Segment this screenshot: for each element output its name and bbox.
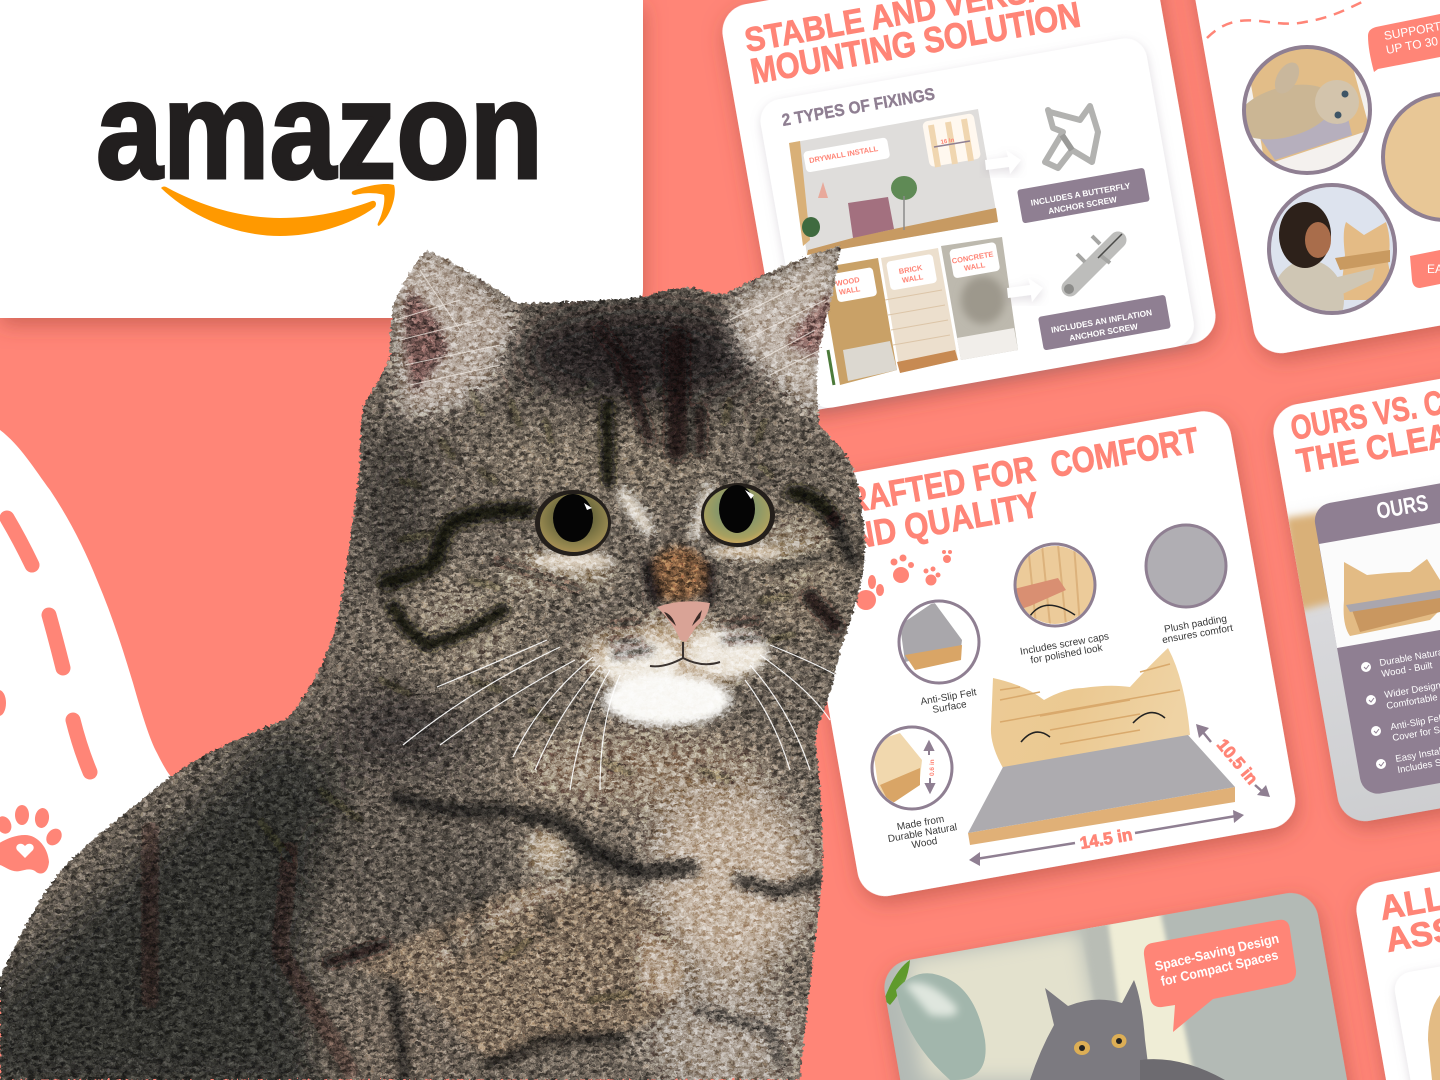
cat right eye — [701, 483, 775, 547]
label: concrete wall: WALL — [963, 260, 986, 273]
dimension: 10.5 in — [1196, 724, 1270, 797]
feature: natural wood — [870, 725, 958, 851]
card: ours vs competitors — [1269, 332, 1440, 826]
product: cat shelf — [968, 648, 1235, 845]
card: space-saving photo — [880, 889, 1387, 1080]
label: drywall install — [803, 137, 890, 173]
list: benefits: Cover for S — [1392, 725, 1440, 744]
caption: Anti-Slip Felt — [920, 687, 978, 708]
photo: drywall room — [789, 109, 998, 255]
heading: and quality: AND QUALITY — [826, 484, 1042, 561]
label: concrete wall — [949, 242, 1000, 279]
label: butterfly anchor screw: ANCHOR SCREW — [1047, 194, 1118, 216]
grey cat — [1030, 980, 1150, 1080]
label: butterfly anchor screw — [1017, 168, 1150, 223]
arrow: to butterfly anchor — [985, 150, 1021, 174]
tabby markings — [150, 330, 852, 1080]
product: wood board — [1428, 995, 1440, 1080]
inset: stud spacing: 16 in — [940, 138, 955, 146]
card: crafted for comfort and quality — [789, 407, 1300, 901]
cat ear hairs — [395, 270, 825, 385]
list: benefits: Wood - Built — [1381, 660, 1434, 680]
list: benefits — [1361, 647, 1440, 776]
photo: tabby cat — [0, 245, 866, 1080]
dashed curve — [1207, 2, 1362, 38]
photo: concrete wall — [941, 237, 1018, 360]
caption: Wood — [911, 836, 938, 851]
icon: butterfly anchor — [1045, 106, 1098, 168]
product: shelf — [1344, 559, 1440, 636]
card: all assembly — [1352, 810, 1440, 1080]
caption: Plush padding — [1163, 614, 1228, 635]
panel: amazon logo card — [0, 0, 643, 318]
label: inflation anchor screw: INCLUDES AN INFLATION — [1050, 307, 1153, 335]
label: wood wall: WOOD — [835, 275, 861, 288]
cat fur body — [0, 245, 866, 1080]
list: benefits: Comfortable — [1386, 692, 1438, 712]
label: inflation anchor screw: ANCHOR SCREW — [1068, 321, 1139, 343]
caption: for polished look — [1030, 643, 1104, 666]
label: brick wall: BRICK — [898, 263, 924, 276]
callout: space-saving design: Space-Saving Design — [1153, 931, 1280, 974]
icon: paw print — [0, 805, 65, 874]
photo circle: shelf close-up — [1383, 94, 1440, 220]
arrow: thickness — [925, 742, 934, 792]
card: stable and versatile mounting solution — [718, 0, 1220, 415]
label: butterfly anchor screw: INCLUDES A BUTTERFLY — [1030, 180, 1132, 208]
icon: inflation anchor — [1064, 234, 1122, 294]
caption: Durable Natural — [887, 822, 958, 845]
dimension: 10.5 in: 10.5 in — [1213, 735, 1262, 788]
panel: ours column — [1312, 454, 1440, 797]
dimension: 14.5 in — [969, 810, 1244, 866]
heading: crafted for comfort: CRAFTED FOR COMFORT — [822, 419, 1202, 525]
heading: amazon wordmark: amazon — [96, 53, 543, 208]
cat left eye — [535, 490, 611, 556]
panel: white wavy shape with dashed path — [0, 430, 172, 1000]
label: wood wall — [833, 267, 877, 303]
heading: fixings: 2 TYPES OF FIXINGS — [780, 84, 936, 130]
label: brick wall — [886, 254, 937, 291]
caption: Surface — [932, 699, 968, 716]
icon: paw trail — [856, 550, 952, 610]
fur mottling — [260, 390, 794, 1000]
label: concrete wall: CONCRETE — [951, 249, 994, 266]
feature: screw caps — [1010, 540, 1110, 666]
callout: space-saving design — [1144, 920, 1296, 1032]
feature: plush padding — [1146, 525, 1234, 646]
photo: brick wall — [881, 248, 958, 373]
label: wood wall: WALL — [838, 284, 861, 297]
panel: inner — [1392, 940, 1440, 1080]
caption — [887, 814, 958, 851]
caption: ensures comfort — [1161, 623, 1234, 646]
photo circle: kitten lying on shelf — [1242, 45, 1372, 175]
blurred wood backdrop — [1288, 507, 1330, 614]
label: easy install — [1410, 250, 1440, 288]
arrow: to inflation anchor — [1007, 278, 1043, 302]
caption: Made from — [896, 814, 945, 833]
dimension: 14.5 in: 14.5 in — [1078, 825, 1134, 853]
card: weight and installation circles — [1185, 0, 1440, 358]
label: inflation anchor screw — [1038, 295, 1171, 350]
caption: Includes screw caps — [1019, 631, 1110, 658]
label: drywall install: DRYWALL INSTALL — [808, 144, 879, 165]
label: brick wall: WALL — [901, 272, 924, 285]
photo: window light, leaf and grey cat — [884, 910, 1225, 1080]
label: 0.6 in: 0.6 in — [929, 759, 936, 776]
feature: anti-slip felt surface — [895, 600, 985, 716]
photo circle: woman installing shelf — [1267, 183, 1397, 315]
icon: amazon smile arrow — [161, 184, 395, 236]
panel: 2 types of fixings — [757, 35, 1197, 411]
callout: space-saving design: for Compact Spaces — [1159, 947, 1280, 989]
cat paw — [351, 882, 685, 1063]
inset: stud spacing — [922, 113, 981, 167]
cat whiskers — [403, 640, 845, 790]
list: benefits: Wider Design — [1384, 680, 1440, 701]
label: supports up to 30 lbs — [1368, 14, 1440, 72]
cat nose — [650, 601, 720, 666]
photo: wood wall — [820, 258, 897, 385]
